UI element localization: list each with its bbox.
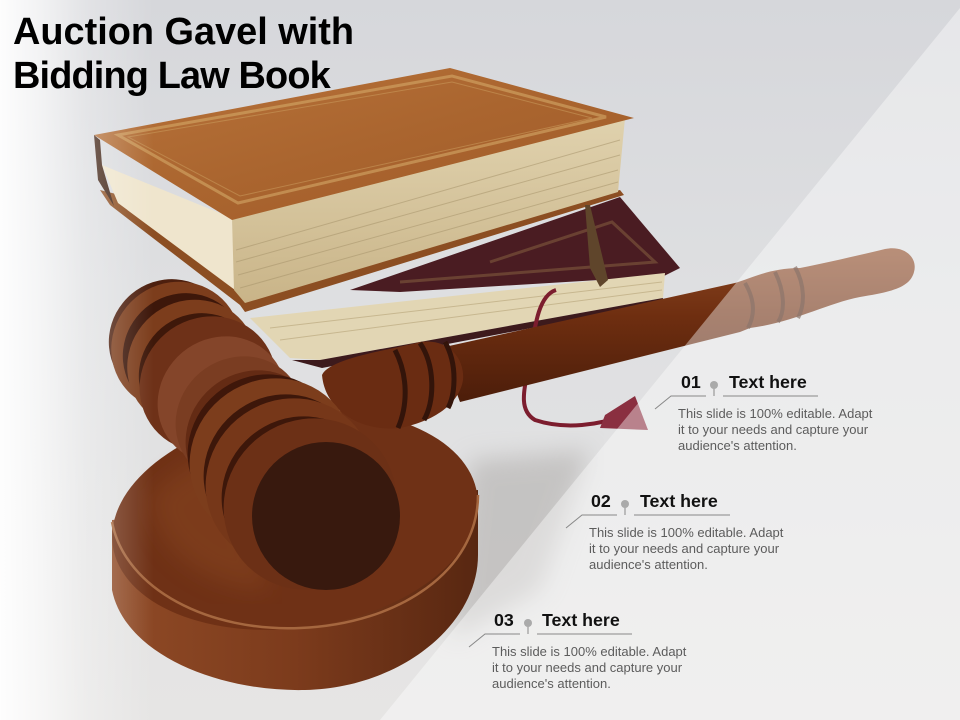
callout 02: This slide is 100% editable. Adapt: [589, 525, 783, 540]
gavel base: [98, 387, 492, 690]
title: [13, 11, 354, 97]
bookmark ribbon: [524, 290, 625, 425]
callout 03: Text here: [542, 610, 620, 630]
gavel handle: [322, 248, 915, 428]
gavel head: [84, 254, 431, 625]
callout 01: it to your needs and capture your: [678, 422, 868, 437]
upper book: [94, 68, 634, 312]
title: Auction Gavel with: [13, 11, 354, 53]
callout 03: it to your needs and capture your: [492, 660, 682, 675]
callout 02: audience's attention.: [589, 557, 708, 572]
callout 01: This slide is 100% editable. Adapt: [678, 406, 872, 421]
callout 02: Text here: [640, 491, 718, 511]
callout 02: it to your needs and capture your: [589, 541, 779, 556]
callout 01: [654, 372, 872, 453]
callout 01: audience's attention.: [678, 438, 797, 453]
callout 03: audience's attention.: [492, 676, 611, 691]
callout 01: 01: [681, 372, 701, 392]
callout 03: This slide is 100% editable. Adapt: [492, 644, 686, 659]
callout 02: 02: [591, 491, 611, 511]
lower book: [250, 197, 680, 368]
callout 01: Text here: [729, 372, 807, 392]
title: Bidding Law Book: [13, 55, 330, 97]
shadows: [450, 450, 590, 640]
callout 03: 03: [494, 610, 514, 630]
